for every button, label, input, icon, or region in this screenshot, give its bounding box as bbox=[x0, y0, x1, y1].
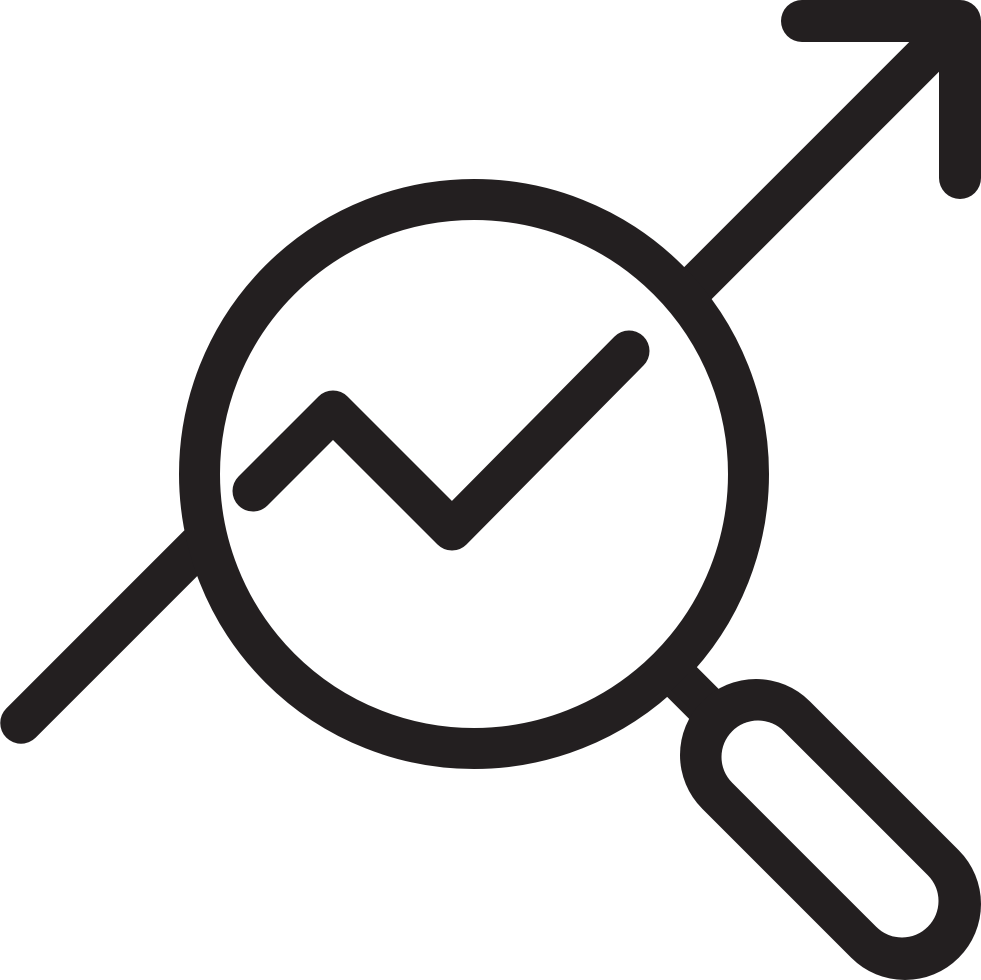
icon: magnifier lens ring bbox=[200, 200, 748, 748]
icon: arrow shaft lower segment bbox=[21, 534, 210, 723]
icon: magnifier neck bbox=[681, 681, 722, 722]
icon: magnifier handle bbox=[756, 755, 905, 904]
icon: arrow shaft upper segment and arrowhead bbox=[680, 21, 960, 301]
line chart inside the lens bbox=[253, 351, 629, 530]
